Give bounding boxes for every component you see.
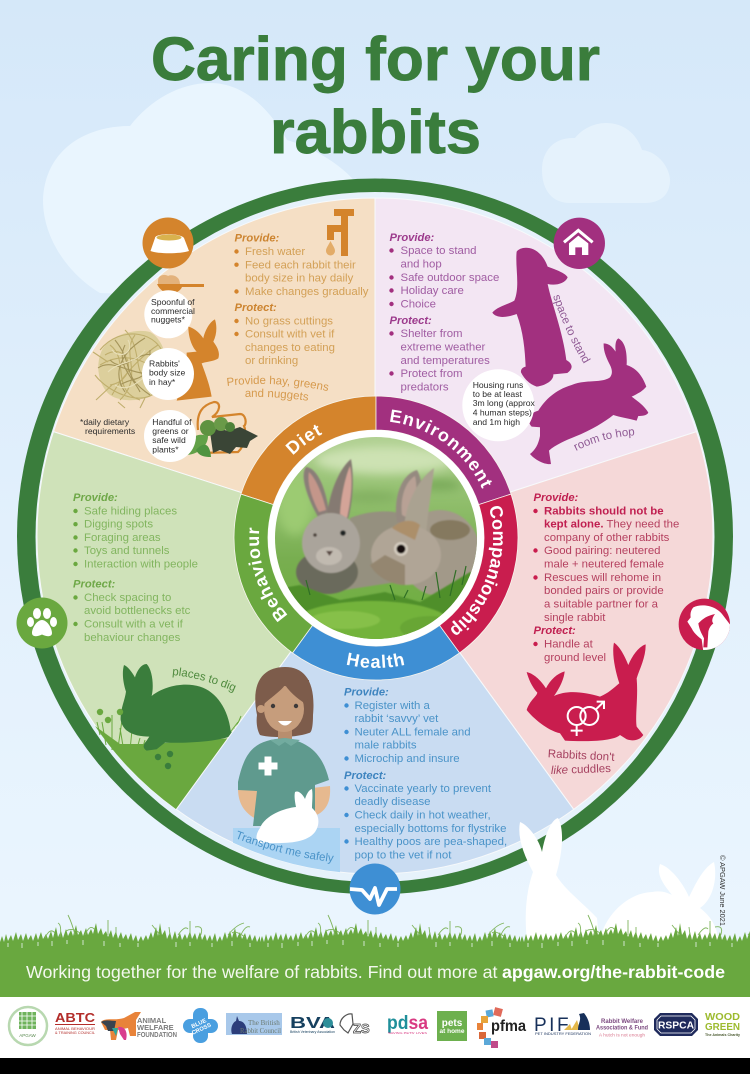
segment labels: Environment bbox=[390, 410, 492, 489]
environment text block: Safe outdoor space bbox=[400, 272, 499, 284]
hay pile bbox=[93, 330, 167, 408]
greens label: Handful of bbox=[152, 417, 192, 427]
logo: Rabbit Welfare Association: Association & Fund bbox=[596, 1026, 648, 1032]
diet text block: No grass cuttings bbox=[245, 316, 333, 328]
panel: health bbox=[176, 652, 574, 874]
title: rabbits bbox=[270, 98, 481, 166]
large cloud bbox=[43, 83, 365, 300]
behaviour text block: Provide: bbox=[73, 492, 118, 504]
footnote: requirements bbox=[85, 426, 135, 436]
logo: BVA: British Veterinary Association bbox=[290, 1030, 335, 1034]
logo: RSPCA: RSPCA bbox=[658, 1020, 694, 1032]
caption: rabbits don't like cuddles bbox=[548, 748, 616, 777]
body size label bbox=[142, 348, 194, 400]
companionship text block: bonded pairs or provide bbox=[544, 585, 664, 597]
health text block: Neuter ALL female and bbox=[354, 726, 471, 738]
body size label: Rabbits' bbox=[149, 359, 180, 369]
logo: PIF: PIF bbox=[534, 1015, 571, 1036]
outer green ring bbox=[17, 178, 733, 894]
diet text block: or drinking bbox=[245, 355, 298, 367]
footnote bbox=[80, 417, 135, 436]
diet text block: body size in hay daily bbox=[245, 272, 354, 284]
environment text block: predators bbox=[400, 382, 449, 394]
logo: Wood Green bbox=[705, 1012, 741, 1037]
greens label: greens or bbox=[152, 426, 189, 436]
environment text block: Provide: bbox=[390, 232, 435, 244]
spoonful label: nuggets* bbox=[151, 315, 186, 325]
caption: rabbits don't like cuddles: Rabbits don't bbox=[548, 748, 616, 764]
health text block: deadly disease bbox=[354, 796, 430, 808]
companionship text block: a suitable partner for a bbox=[544, 598, 659, 610]
health wedge bbox=[176, 536, 574, 874]
panel: behaviour bbox=[36, 432, 290, 809]
health text block: especially bottoms for flystrike bbox=[354, 823, 506, 835]
health text block: Healthy poos are pea-shaped, bbox=[354, 836, 507, 848]
icon: house bbox=[554, 218, 605, 269]
grass strip bbox=[0, 905, 750, 997]
logo: ABTC: & TRAINING COUNCIL bbox=[55, 1031, 95, 1035]
logo: RSPCA bbox=[654, 1013, 698, 1036]
companionship text block: male + neutered female bbox=[544, 558, 664, 570]
caption: places to dig: places to dig bbox=[172, 668, 236, 693]
body size label: body size bbox=[149, 368, 186, 378]
environment text block: Choice bbox=[400, 298, 436, 310]
companionship text block: Handle at bbox=[544, 638, 594, 650]
call to action: Working together for the welfare of rabbits. Find out more at bbox=[26, 962, 498, 982]
companionship text block: Good pairing: neutered bbox=[544, 545, 661, 557]
logo: BVA bbox=[290, 1015, 335, 1034]
health text block: rabbit ‘savvy’ vet bbox=[354, 713, 439, 725]
icon: male and female symbols bbox=[568, 702, 604, 736]
white circle behind photo bbox=[268, 430, 484, 646]
companionship text block: kept alone. They need the bbox=[544, 519, 679, 531]
icon: pulse bbox=[350, 864, 400, 914]
logo: pets at home: at home bbox=[440, 1028, 465, 1035]
diet wedge bbox=[54, 198, 375, 536]
behaviour text block: Consult with a vet if bbox=[84, 618, 184, 630]
logo: BVA: BVA bbox=[290, 1015, 335, 1032]
logo: Animal Welfare Foundation: FOUNDATION bbox=[137, 1030, 177, 1039]
companionship text block: single rabbit bbox=[544, 612, 606, 624]
environment text block: Space to stand bbox=[400, 245, 476, 257]
caption: room to hop: room to hop bbox=[574, 429, 634, 451]
segment labels bbox=[248, 410, 503, 668]
segment labels: Behaviour bbox=[248, 528, 288, 622]
segment labels: Health bbox=[346, 652, 404, 668]
ground bbox=[95, 726, 233, 809]
transport box bbox=[233, 828, 340, 872]
logo: Animal Welfare Foundation bbox=[101, 1012, 177, 1040]
greens bbox=[185, 417, 258, 457]
health text block: Provide: bbox=[344, 687, 389, 699]
health text block: Check daily in hot weather, bbox=[354, 810, 491, 822]
logo: Wood Green: GREEN bbox=[705, 1022, 740, 1033]
grass tuft bbox=[97, 715, 241, 752]
logo strip bbox=[0, 997, 750, 1058]
spoonful label bbox=[144, 290, 195, 338]
rabbit silhouette: hopping bbox=[529, 338, 648, 464]
health text block: Vaccinate yearly to prevent bbox=[354, 783, 492, 795]
health text block: Protect: bbox=[344, 770, 387, 782]
logo: Rabbit Welfare Association bbox=[596, 1019, 648, 1038]
behaviour text block: Toys and tunnels bbox=[84, 545, 170, 557]
logo: Blue Cross: BLUE bbox=[191, 1018, 208, 1030]
behaviour text block: Protect: bbox=[73, 579, 116, 591]
diet text block: changes to eating bbox=[245, 342, 335, 354]
black footer strip bbox=[0, 1058, 750, 1074]
title bbox=[151, 25, 600, 166]
icon: tap bbox=[326, 209, 354, 256]
logo: PIF: PET INDUSTRY FEDERATION bbox=[535, 1032, 591, 1036]
segment: behaviour bbox=[234, 494, 312, 653]
behaviour text block: Foraging areas bbox=[84, 532, 161, 544]
behaviour wedge bbox=[37, 432, 375, 809]
housing note bbox=[462, 369, 536, 441]
panel: companionship bbox=[375, 432, 713, 809]
health text block bbox=[344, 687, 507, 862]
housing note: Housing runs bbox=[473, 380, 523, 390]
panel: diet bbox=[54, 198, 374, 492]
greens label bbox=[144, 410, 196, 462]
environment text block: Protect from bbox=[400, 368, 463, 380]
pale ring lining bbox=[36, 192, 714, 882]
health text block: Register with a bbox=[354, 700, 431, 712]
vet illustration bbox=[238, 667, 330, 826]
logo: pdsa: pdsa bbox=[387, 1013, 428, 1034]
logo: British Rabbit Council: The British bbox=[248, 1019, 280, 1027]
diet text block bbox=[234, 232, 369, 367]
logo: APGAW: APGAW bbox=[19, 1033, 37, 1038]
logo: PIF bbox=[534, 1013, 591, 1036]
diet text block: Protect: bbox=[234, 302, 277, 314]
health text block: Microchip and insure bbox=[354, 753, 460, 765]
icon: bowl bbox=[142, 218, 194, 268]
icon: spoon of nuggets bbox=[157, 275, 204, 293]
logo: ZSL: ZS bbox=[353, 1021, 370, 1036]
photo: two rabbits on grass bbox=[275, 437, 477, 639]
behaviour text block: behaviour changes bbox=[84, 632, 181, 644]
companionship text block: company of other rabbits bbox=[544, 532, 670, 544]
companionship text block: Provide: bbox=[534, 492, 579, 504]
body size label: in hay* bbox=[149, 377, 176, 387]
greens label: plants* bbox=[152, 445, 179, 455]
logo: pets at home bbox=[437, 1011, 467, 1041]
housing note: 3m long (approx bbox=[473, 398, 536, 408]
environment text block: and hop bbox=[400, 258, 442, 270]
behaviour text block: avoid bottlenecks etc bbox=[84, 605, 191, 617]
segment: environment bbox=[376, 396, 511, 505]
logo: pdsa: SAVING PETS' LIVES bbox=[388, 1031, 427, 1035]
logo: ABTC: ANIMAL BEHAVIOUR bbox=[55, 1027, 96, 1031]
rabbit silhouettes: pair bbox=[527, 643, 646, 741]
icon: paw bbox=[16, 598, 68, 648]
environment text block: Holiday care bbox=[400, 285, 464, 297]
behaviour text block: Safe hiding places bbox=[84, 506, 177, 518]
small cloud bbox=[542, 123, 670, 203]
footnote: *daily dietary bbox=[80, 417, 130, 427]
logo: pfma: pfma bbox=[491, 1018, 526, 1035]
segment labels: Diet bbox=[285, 424, 322, 455]
companionship text block: ground level bbox=[544, 652, 606, 664]
caption: rabbits don't like cuddles: like cuddles bbox=[551, 763, 611, 777]
logo: British Rabbit Council: Rabbit Council bbox=[240, 1027, 281, 1035]
companionship text block: Rabbits should not be bbox=[544, 506, 664, 518]
icon: hand outline bbox=[198, 402, 246, 453]
call to action: apgaw.org/the-rabbit-code bbox=[502, 962, 725, 982]
caption: transport me safely: Transport me safely bbox=[238, 830, 334, 864]
companionship text block: Protect: bbox=[534, 625, 576, 637]
greens label: safe wild bbox=[152, 435, 186, 445]
logo: ABTC: ABTC bbox=[55, 1011, 95, 1025]
spoonful label: Spoonful of bbox=[151, 297, 195, 307]
logo: Wood Green: WOOD bbox=[705, 1012, 740, 1023]
diet text block: Consult with vet if bbox=[245, 328, 335, 340]
curved caption: provide hay: and nuggets bbox=[245, 388, 308, 401]
behaviour text block: Check spacing to bbox=[84, 592, 171, 604]
diet text block: Fresh water bbox=[245, 246, 305, 258]
housing note: 4 human steps) bbox=[473, 408, 532, 418]
logo: Animal Welfare Foundation: WELFARE bbox=[137, 1023, 174, 1032]
environment text block bbox=[389, 232, 499, 394]
health text block: male rabbits bbox=[354, 740, 417, 752]
segment: diet bbox=[241, 396, 376, 505]
logo: pets at home: pets bbox=[442, 1018, 463, 1029]
logo: pfma bbox=[477, 1007, 526, 1048]
rabbit silhouette: digging bbox=[121, 664, 233, 751]
logo: Blue Cross bbox=[183, 1008, 218, 1043]
segment labels: Companionship bbox=[451, 506, 503, 635]
behaviour text block: Digging spots bbox=[84, 519, 153, 531]
icon: animals and person bbox=[679, 599, 732, 652]
segment: companionship bbox=[440, 494, 518, 653]
copyright note: © APGAW June 2021 bbox=[718, 855, 727, 926]
caption: space to stand: space to stand bbox=[553, 295, 591, 364]
companionship text block: Rescues will rehome in bbox=[544, 572, 661, 584]
diet text block: Make changes gradually bbox=[245, 286, 369, 298]
logo: Animal Welfare Foundation: ANIMAL bbox=[137, 1016, 167, 1025]
logo: APGAW bbox=[9, 1007, 47, 1045]
housing note: to be at least bbox=[473, 389, 523, 399]
environment text block: extreme weather bbox=[400, 342, 486, 354]
curved caption: provide hay: Provide hay, greens bbox=[227, 376, 328, 391]
behaviour text block: Interaction with people bbox=[84, 558, 198, 570]
environment text block: and temperatures bbox=[400, 355, 490, 367]
dots bbox=[97, 709, 173, 769]
diet text block: Feed each rabbit their bbox=[245, 259, 356, 271]
companionship text block bbox=[533, 492, 679, 664]
environment wedge bbox=[375, 198, 696, 536]
logo: Rabbit Welfare Association: Rabbit Welfare bbox=[601, 1019, 644, 1025]
health text block: pop to the vet if not bbox=[354, 850, 452, 862]
panel: environment bbox=[376, 198, 696, 492]
logo: Rabbit Welfare Association: A hutch is not enough bbox=[599, 1032, 645, 1038]
call to action bbox=[26, 962, 725, 982]
title: Caring for your bbox=[151, 25, 600, 93]
rabbit silhouette: standing bbox=[492, 248, 572, 387]
rabbit silhouette: diet bbox=[177, 319, 219, 401]
logo: Blue Cross: CROSS bbox=[191, 1022, 212, 1037]
logo: ABTC bbox=[55, 1011, 96, 1035]
companionship wedge bbox=[375, 432, 713, 809]
spoonful label: commercial bbox=[151, 306, 195, 316]
logo: ZSL bbox=[340, 1014, 370, 1036]
environment text block: Protect: bbox=[390, 315, 432, 327]
centre ring bbox=[234, 396, 518, 680]
behaviour text block bbox=[73, 492, 198, 644]
logo: Wood Green: The Animals Charity bbox=[705, 1033, 741, 1037]
segment: health bbox=[292, 625, 460, 680]
housing note: and 1m high bbox=[473, 417, 520, 427]
white rabbit held by vet bbox=[256, 789, 318, 843]
logo: British Rabbit Council bbox=[226, 1013, 282, 1035]
diet text block: Provide: bbox=[234, 232, 280, 244]
white rabbit silhouettes bbox=[519, 818, 719, 950]
environment text block: Shelter from bbox=[400, 328, 463, 340]
